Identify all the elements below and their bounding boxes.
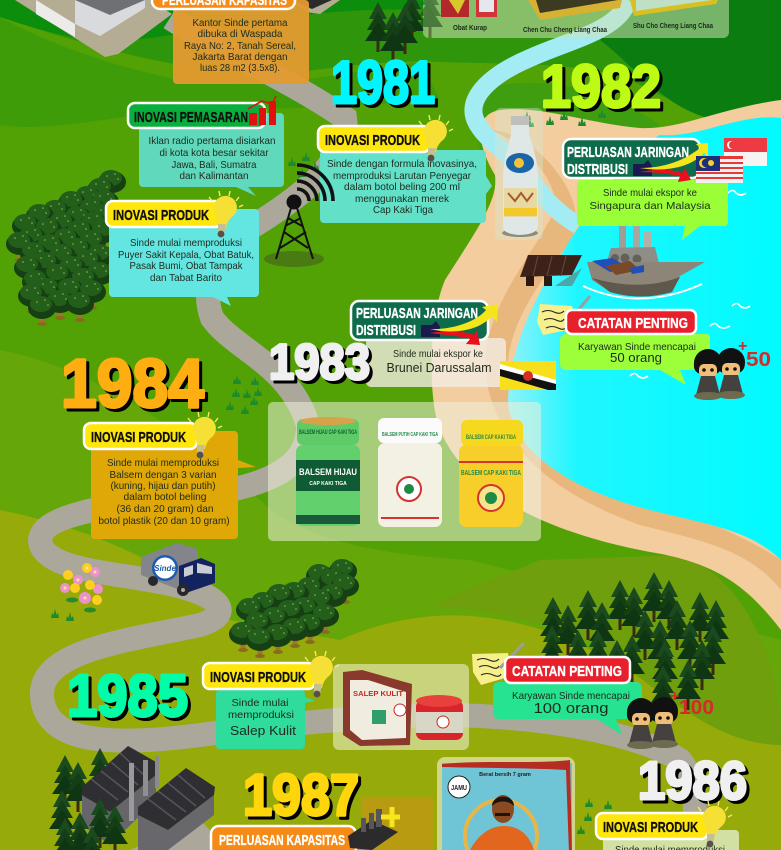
panel: bottle product — [495, 108, 543, 240]
heading: DISTRIBUSI — [567, 161, 628, 178]
text: kantor: Jakarta Barat dengan — [192, 51, 288, 63]
panel: catatan penting 100 — [472, 643, 714, 749]
text: Puyer Sakit Kepala, Obat Batuk, — [118, 249, 254, 261]
text — [578, 341, 696, 365]
image: green balsam: BALSEM HIJAU — [299, 467, 357, 477]
text: Sinde mulai — [232, 697, 288, 709]
heading: PERLUASAN KAPASITAS — [219, 832, 345, 849]
panel: perluasan 1982 — [563, 138, 767, 240]
icon: bulb — [698, 801, 732, 847]
image: salep box: SALEP KULIT — [353, 691, 404, 698]
heading: CATATAN PENTING — [512, 663, 622, 680]
heading — [128, 103, 265, 128]
flag: malaysia — [696, 156, 743, 183]
heading: INOVASI PEMASARAN — [134, 109, 248, 126]
panel: inovasi produk salep — [203, 651, 339, 749]
flag: singapore — [724, 138, 767, 166]
image: bottle — [502, 116, 538, 237]
trees: factory pines front — [52, 798, 128, 850]
stat: plus 50 — [738, 338, 771, 371]
image: green balsam: BALSEM HIJAU CAP KAKI TIGA — [299, 430, 357, 436]
text: kantor — [184, 17, 296, 74]
year 1984: 1984 — [61, 345, 204, 422]
image: white balsam: BALSEM PUTIH CAP KAKI TIGA — [382, 432, 438, 438]
year 1986: 1986 — [638, 751, 747, 811]
icon: radio tower — [264, 165, 333, 267]
panel: inovasi produk puyer — [106, 191, 259, 306]
heading: DISTRIBUSI — [356, 322, 416, 339]
text: (36 dan 20 gram) dan — [116, 503, 214, 515]
heading: INOVASI PRODUK — [603, 819, 698, 836]
sea — [508, 117, 781, 560]
icon: arrows — [640, 143, 708, 182]
grass tufts — [226, 109, 612, 834]
trees: left cluster — [6, 170, 126, 326]
sea waves — [562, 190, 750, 378]
text: kantor: luas 28 m2 (3.5x8). — [200, 62, 280, 74]
stat: plus 50: 50 — [746, 349, 771, 371]
panel: perluasan 1983 — [351, 301, 556, 390]
icon: factory plus — [348, 807, 400, 850]
year 1981: 1981 — [331, 49, 435, 116]
text: Sinde mulai ekspor ke — [603, 187, 697, 199]
icon: capacity box top — [290, 0, 340, 14]
text: Sinde dengan formula inovasinya, — [327, 158, 477, 170]
stat: plus 50: + — [738, 338, 747, 355]
text: memproduksi — [228, 709, 294, 721]
icon: people — [694, 348, 745, 400]
text: Sinde mulai ekspor ke — [393, 348, 483, 360]
panel: salep products — [333, 664, 469, 750]
image: shu cho box — [630, 0, 718, 16]
heading — [563, 139, 700, 178]
text: Karyawan Sinde mencapai — [512, 690, 630, 702]
text — [386, 348, 492, 375]
heading: INOVASI PRODUK — [210, 669, 306, 686]
text: kantor: Kantor Sinde pertama — [192, 17, 288, 29]
image: jamu packaging: Berat bersih 7 gram — [479, 772, 531, 778]
heading — [106, 201, 222, 227]
icon: bulb — [188, 412, 222, 458]
text: dalam botol beling — [124, 491, 207, 503]
text: dan Kalimantan — [180, 170, 249, 182]
icon: arrows — [430, 304, 498, 345]
panel: inovasi produk 1986 — [596, 801, 739, 850]
factory — [82, 746, 230, 850]
heading — [566, 310, 696, 334]
flag: brunei — [500, 361, 556, 390]
text: Iklan radio pertama disiarkan — [148, 135, 276, 147]
labels: product names — [453, 23, 713, 34]
heading — [596, 813, 708, 839]
icon: delivery truck — [141, 543, 215, 596]
image: green balsam: CAP KAKI TIGA — [309, 481, 347, 487]
road — [40, 18, 695, 815]
text: Pasak Bumi, Obat Tampak — [130, 260, 243, 272]
image: green balsam — [296, 417, 360, 526]
text — [98, 457, 230, 527]
text — [327, 158, 477, 216]
text: 100 orang — [534, 701, 608, 717]
panel: jamu product — [437, 757, 575, 850]
image: jamu packaging — [442, 760, 572, 850]
heading: INOVASI PRODUK — [325, 132, 420, 149]
text: di kota kota besar sekitar — [160, 147, 269, 159]
icon: chart — [248, 96, 276, 125]
heading: INOVASI PRODUK — [91, 429, 186, 446]
panel: catatan penting 50 — [537, 296, 771, 400]
image: yellow balsam: BALSEM CAP KAKI TIGA — [461, 468, 521, 477]
text: menggunakan merek — [355, 193, 450, 205]
text — [512, 690, 630, 717]
icon: note and pen — [472, 643, 524, 685]
text: Balsem dengan 3 varian — [110, 469, 217, 481]
text: Karyawan Sinde mencapai — [578, 341, 696, 353]
heading: INOVASI PRODUK — [113, 207, 209, 224]
icon: delivery truck: Sinde — [154, 564, 176, 573]
icon: wooden dock — [520, 255, 582, 286]
image: white balsam — [378, 418, 442, 527]
text: Brunei Darussalam — [386, 360, 492, 375]
text: Cap Kaki Tiga — [373, 204, 433, 216]
image: obat kurap — [441, 0, 497, 17]
heading: CATATAN PENTING — [578, 315, 688, 332]
heading — [84, 423, 197, 449]
trees: factory pines back — [49, 748, 113, 840]
labels: product names: Shu Cho Cheng Liang Chaa — [633, 23, 713, 30]
heading: perluasan — [152, 0, 295, 9]
image: yellow balsam — [459, 420, 523, 527]
trees: right pines — [539, 572, 729, 715]
panel: perluasan kapasitas — [211, 797, 433, 850]
image: jamu packaging: JAMU — [451, 783, 467, 792]
text: memproduksi Larutan Penyegar — [333, 170, 471, 182]
heading — [318, 126, 430, 152]
text: Sinde mulai memproduksi — [130, 237, 242, 249]
icon: flowers — [51, 563, 103, 621]
text: 50 orang — [610, 350, 662, 365]
heading: PERLUASAN JARINGAN — [567, 144, 689, 161]
text: kantor: Raya No: 2, Tanah Sereal, — [184, 40, 296, 52]
panel: kantor pertama — [152, 0, 309, 84]
heading — [505, 657, 630, 683]
beach — [432, 100, 781, 630]
stat: plus 100: + — [670, 688, 679, 705]
icon: cargo ship — [583, 217, 705, 299]
panel: inovasi produk balsem — [84, 412, 256, 539]
text: Jawa, Bali, Sumatra — [172, 159, 257, 171]
text: dan Tabat Barito — [150, 272, 222, 284]
heading — [211, 826, 356, 850]
icon: bulb — [305, 651, 339, 697]
panel: inovasi pemasaran — [128, 96, 284, 196]
panel: product samples top — [417, 0, 729, 38]
text: botol plastik (20 dan 10 gram) — [98, 515, 230, 527]
labels: product names: Chen Chu Cheng Liang Chaa — [523, 27, 607, 34]
text: Sinde mulai memproduksi — [107, 457, 219, 469]
panel: balsam products — [268, 402, 541, 541]
text — [118, 237, 254, 284]
text — [228, 697, 296, 738]
building: first office — [15, 0, 172, 57]
text: Salep Kulit — [230, 723, 296, 738]
heading: PERLUASAN JARINGAN — [356, 305, 478, 322]
year 1983: 1983 — [269, 334, 370, 390]
text: kantor: dibuka di Waspada — [198, 28, 283, 40]
heading — [351, 301, 488, 340]
text — [148, 135, 276, 182]
text: dalam botol beling 200 ml — [344, 181, 460, 193]
image: salep jar — [416, 695, 463, 740]
river — [473, 0, 628, 225]
icon: bulb — [209, 191, 243, 237]
year 1987: 1987 — [243, 763, 359, 828]
panel: inovasi produk larutan — [318, 115, 492, 223]
year 1982: 1982 — [541, 53, 661, 120]
stat: plus 100 — [670, 688, 714, 719]
image: yellow balsam: BALSEM CAP KAKI TIGA — [466, 435, 516, 441]
text — [590, 187, 711, 212]
text: Singapura dan Malaysia — [590, 200, 711, 212]
year 1985: 1985 — [67, 663, 188, 729]
trees: top pines — [365, 0, 425, 62]
text: (kuning, hijau dan putih) — [110, 480, 216, 492]
icon: bulb — [419, 115, 453, 161]
labels: product names: Obat Kurap — [453, 25, 487, 32]
trees: middle cluster — [229, 559, 359, 658]
image: chen chu box — [528, 0, 622, 20]
icon: people — [627, 697, 678, 749]
icon: note and pen — [537, 296, 590, 335]
stat: plus 100: 100 — [679, 697, 714, 719]
